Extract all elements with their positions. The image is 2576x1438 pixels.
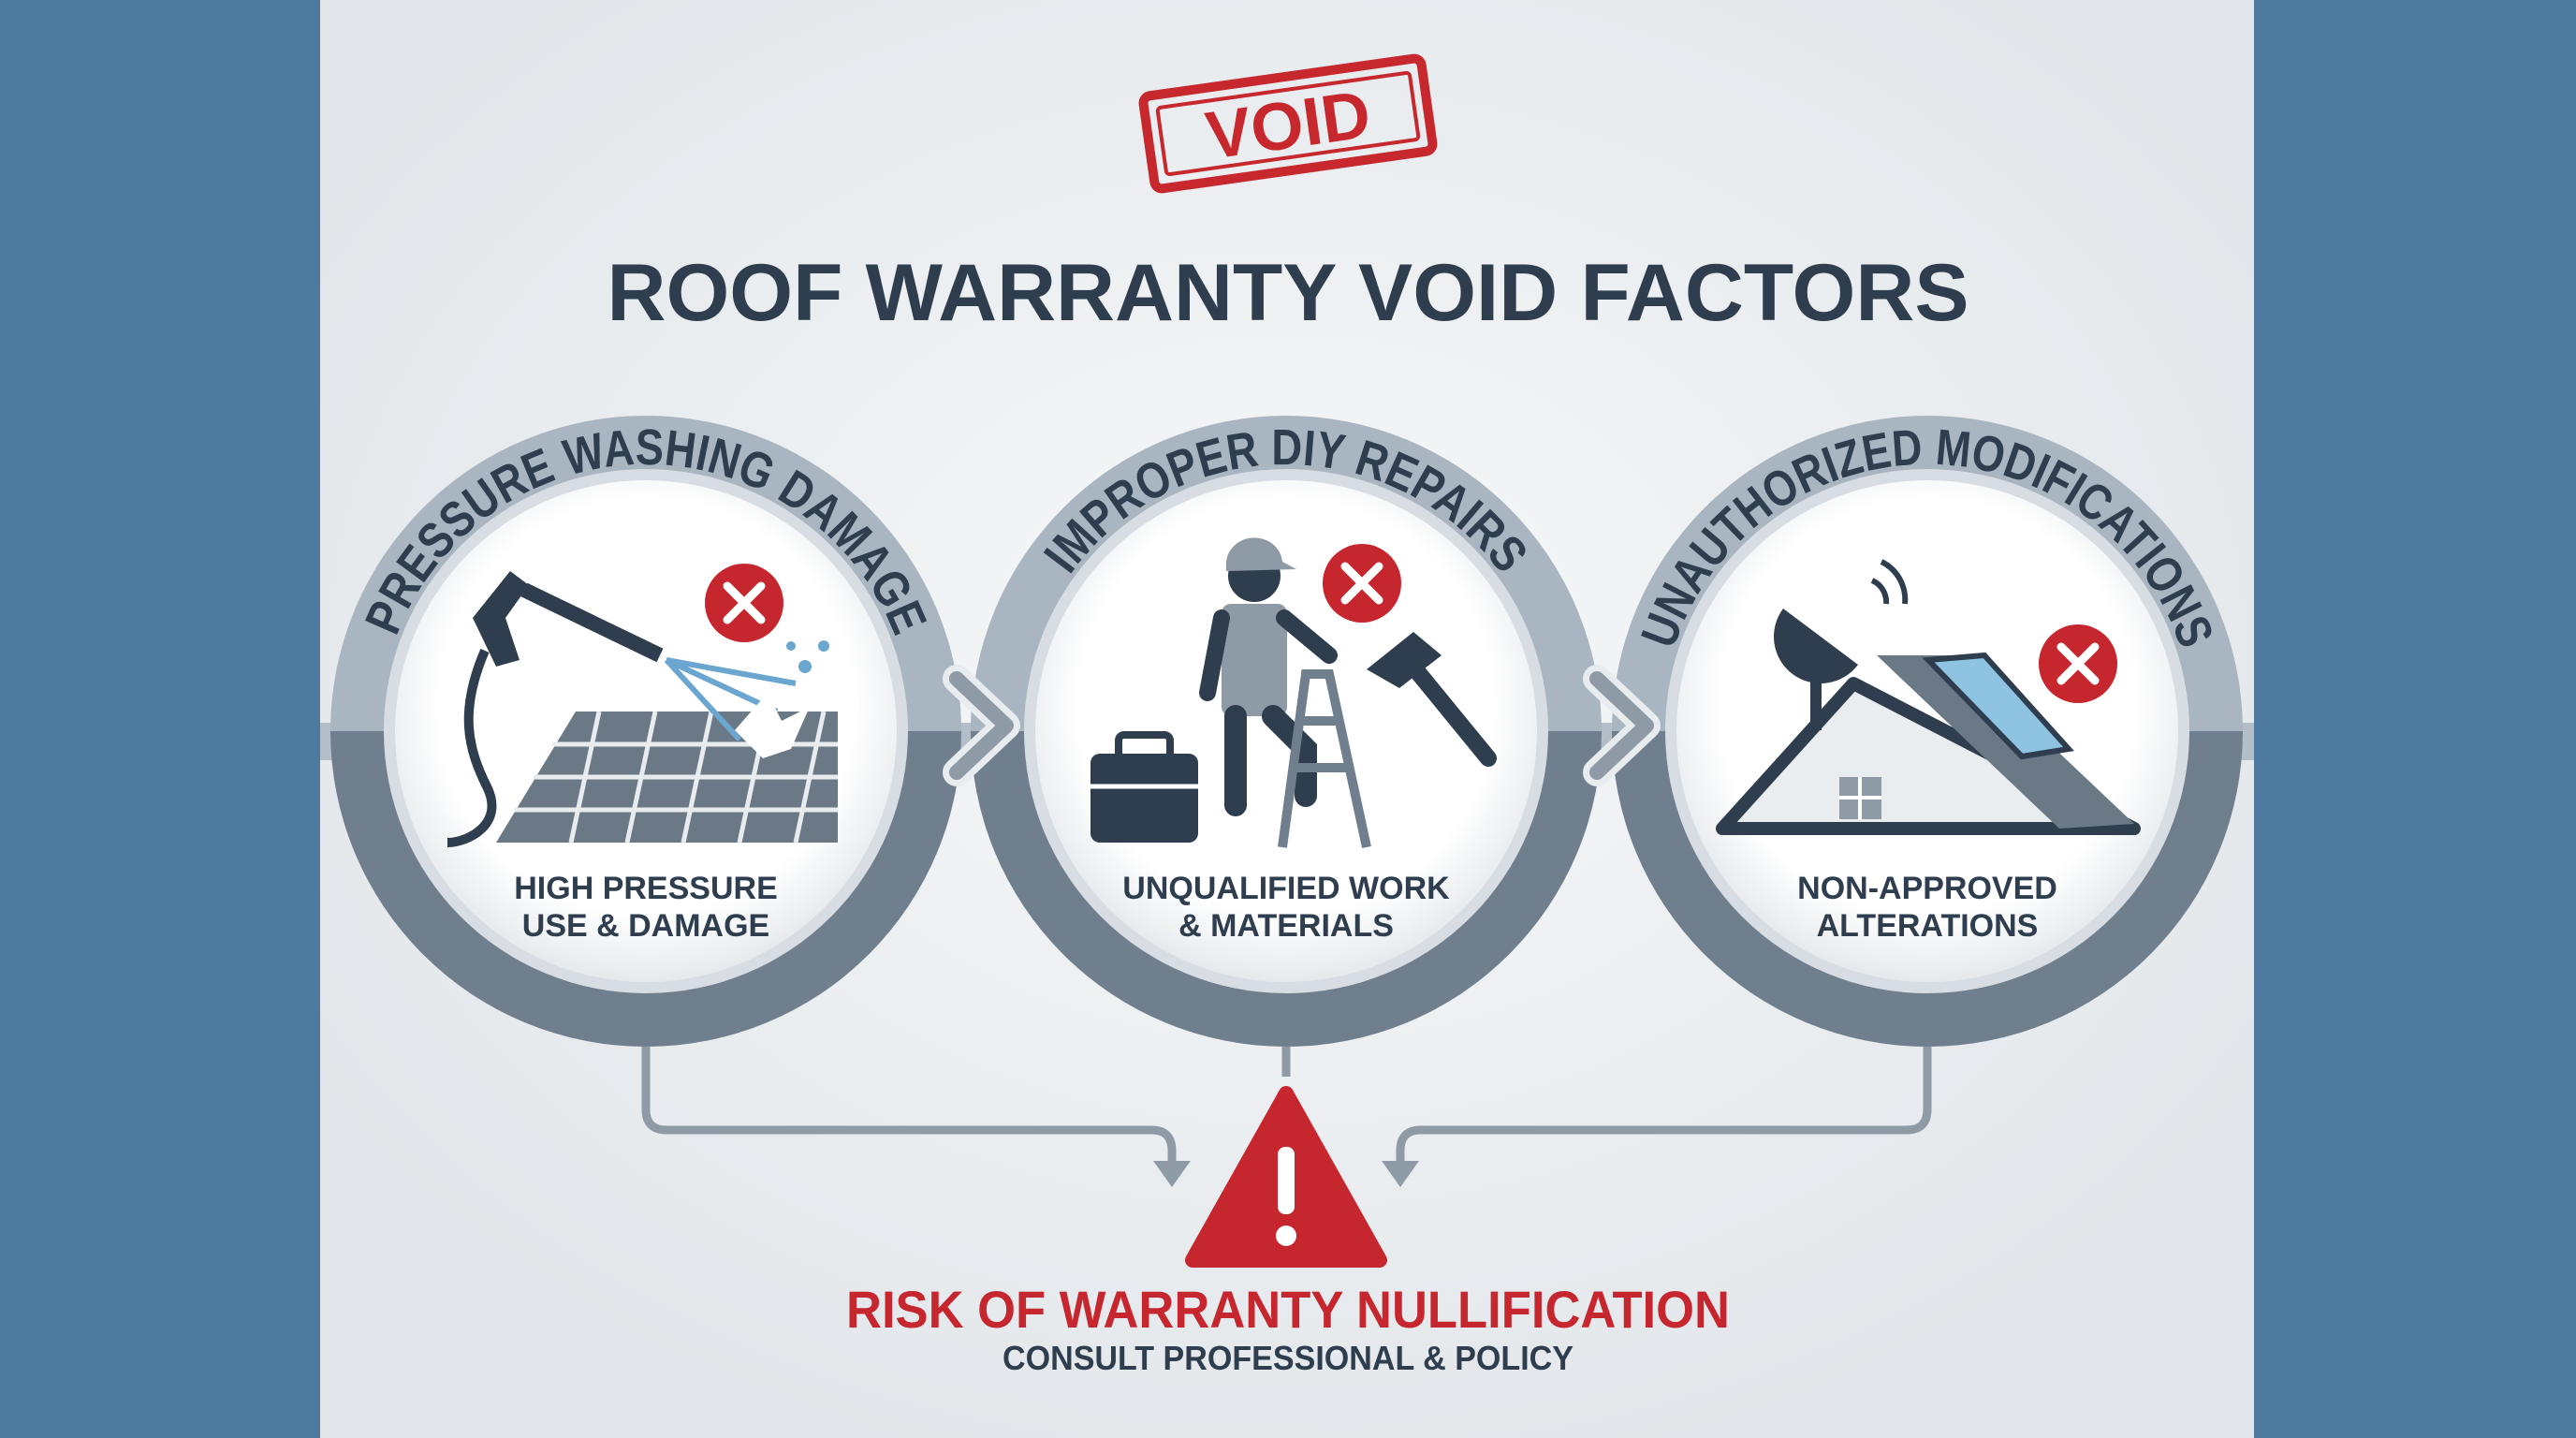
- caption: [1797, 871, 2057, 944]
- arrow 1: [957, 679, 1006, 772]
- title: ROOF WARRANTY VOID FACTORS: [607, 248, 1969, 338]
- icon: red x: [2039, 624, 2117, 703]
- arc heading: IMPROPER DIY REPAIRS: [1043, 430, 1526, 573]
- stamp: VOID: [1143, 58, 1433, 189]
- connector arrows to warning: [646, 1047, 1927, 1166]
- conclusion text: [846, 1280, 1730, 1377]
- caption: ALTERATIONS: [1817, 908, 2038, 944]
- caption: NON-APPROVED: [1797, 871, 2057, 906]
- arrow 2: [1597, 679, 1647, 772]
- caption: HIGH PRESSURE: [514, 871, 778, 906]
- caption: & MATERIALS: [1178, 908, 1394, 944]
- caption: [1122, 871, 1450, 944]
- stamp: VOID: VOID: [1202, 77, 1375, 174]
- panel: unauthorized modifications: [1612, 416, 2243, 1047]
- caption: USE & DAMAGE: [522, 908, 769, 944]
- panel: pressure washing: [330, 416, 961, 1047]
- icon: red x: [705, 564, 783, 642]
- icon: worker on ladder with toolbox: [1090, 537, 1488, 847]
- panel: DIY repairs: [971, 416, 1602, 1047]
- icon: pressure washer on roof: [447, 571, 838, 843]
- conclusion text: RISK OF WARRANTY NULLIFICATION: [846, 1280, 1730, 1339]
- icon: red x: [1323, 544, 1401, 623]
- connector band behind circles: [320, 723, 2254, 760]
- caption: UNQUALIFIED WORK: [1122, 871, 1450, 906]
- caption: [514, 871, 778, 944]
- icon: warning triangle: [1193, 1093, 1380, 1260]
- arc heading: UNAUTHORIZED MODIFICATIONS: [1641, 429, 2211, 646]
- icon: house with dish and skylight: [1722, 562, 2134, 829]
- conclusion text: CONSULT PROFESSIONAL & POLICY: [1003, 1339, 1573, 1377]
- arc heading: PRESSURE WASHING DAMAGE: [365, 429, 927, 636]
